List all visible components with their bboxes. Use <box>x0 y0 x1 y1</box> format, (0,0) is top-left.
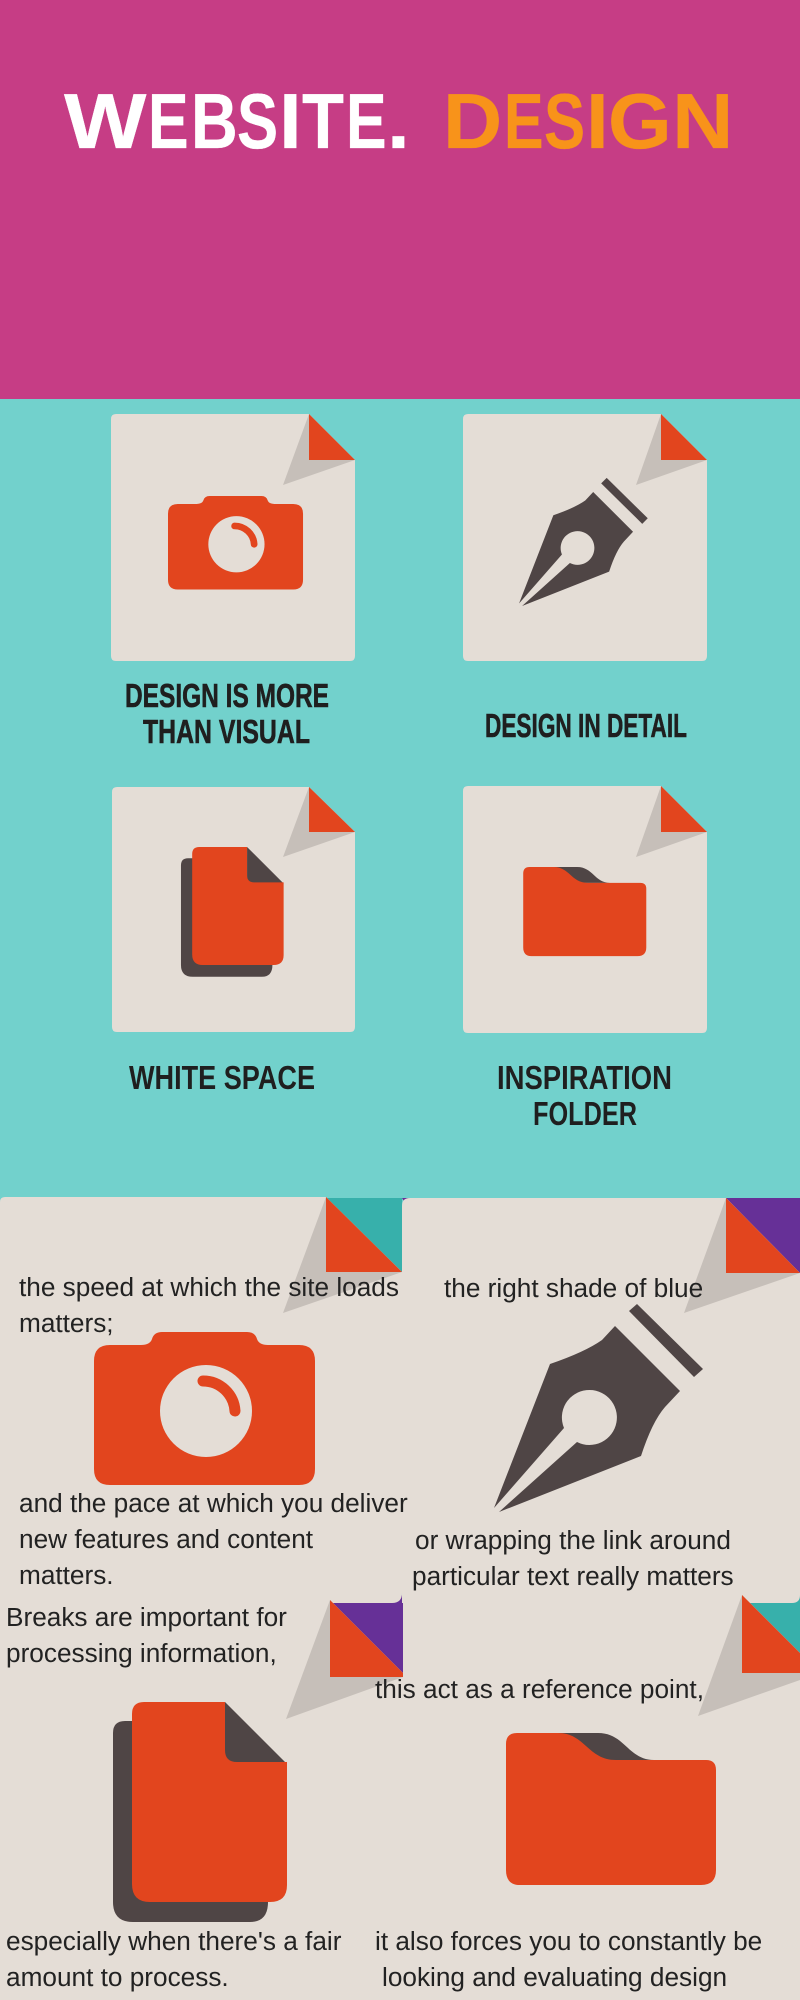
heading: design is more than visual <box>125 677 329 750</box>
text: pace: matters. <box>19 1560 114 1590</box>
text: especially: amount to process. <box>6 1962 229 1992</box>
heading: design in detail: DESIGN IN DETAIL <box>485 707 687 744</box>
fold: panel 3 <box>286 1600 403 1719</box>
fold: panel 1 <box>283 1197 402 1313</box>
card: camera <box>111 414 355 661</box>
text: speed: the speed at which the site loads <box>19 1272 399 1302</box>
corner square: panel 4 teal <box>742 1595 800 1655</box>
heading: design is more than visual: THAN VISUAL <box>143 713 310 750</box>
title: website: I <box>279 77 302 165</box>
title: design: D <box>443 77 502 165</box>
panel: lower right beige <box>403 1595 800 2000</box>
text: especially: especially when there's a fair <box>6 1926 342 1956</box>
heading: white space: WHITE SPACE <box>129 1059 315 1096</box>
text: forces: looking and evaluating design <box>382 1962 727 1992</box>
heading: design is more than visual: DESIGN IS MORE <box>125 677 329 714</box>
title: design <box>443 77 733 165</box>
icon: pen nib <box>519 478 648 606</box>
panel: speed paper <box>0 1197 402 1603</box>
title: website: . <box>387 77 410 165</box>
fold: panel 4 <box>698 1595 800 1716</box>
text: forces: it also forces you to constantly be <box>375 1926 762 1956</box>
panel: blue shade paper <box>402 1198 800 1603</box>
text: wrapping link: or wrapping the link around <box>415 1525 731 1555</box>
icon: documents <box>181 847 284 977</box>
title: website: E <box>346 77 386 165</box>
text: pace: new features and content <box>19 1524 314 1554</box>
icon: large folder <box>506 1733 716 1885</box>
title: website: S <box>237 77 278 165</box>
text: breaks <box>6 1602 287 1668</box>
title: website: W <box>64 77 146 165</box>
card: document <box>112 787 355 1032</box>
title: website: T <box>302 77 344 165</box>
heading: inspiration folder: FOLDER <box>533 1095 637 1132</box>
title: design: I <box>586 77 609 165</box>
icon: folder <box>523 867 646 956</box>
corner square: panel 1 teal <box>326 1198 402 1273</box>
icon: camera <box>168 496 303 589</box>
title: website: B <box>190 77 237 165</box>
icon: large camera <box>94 1332 315 1485</box>
background: teal section <box>0 399 800 1209</box>
title: design: S <box>544 77 585 165</box>
text: wrapping link: particular text really matters <box>412 1561 734 1591</box>
title: design: G <box>608 77 672 165</box>
text: speed: matters; <box>19 1308 114 1338</box>
title: website <box>64 77 410 165</box>
text: breaks: Breaks are important for <box>6 1602 287 1632</box>
heading: inspiration folder: INSPIRATION <box>497 1059 672 1096</box>
icon: large documents <box>113 1702 287 1922</box>
text: pace: and the pace at which you deliver <box>19 1488 408 1518</box>
text: forces <box>375 1926 762 1992</box>
panel: lower left beige <box>0 1600 403 2000</box>
heading: inspiration folder <box>497 1059 672 1132</box>
text: especially <box>6 1926 342 1992</box>
text: right shade: the right shade of blue <box>444 1273 703 1303</box>
header band <box>0 0 800 399</box>
corner square: panel 3 purple <box>330 1595 403 1677</box>
text: wrapping link <box>412 1525 734 1591</box>
card: folder <box>463 786 707 1033</box>
text: speed <box>19 1272 399 1338</box>
corner square: panel 2 purple <box>402 1198 800 1274</box>
text: breaks: processing information, <box>6 1638 277 1668</box>
text: pace <box>19 1488 408 1590</box>
title: design: E <box>504 77 543 165</box>
title: design: N <box>672 77 733 165</box>
icon: large pen nib <box>494 1304 703 1512</box>
text: reference point: this act as a reference point, <box>375 1674 704 1704</box>
title: website: E <box>148 77 188 165</box>
fold: panel 2 <box>684 1198 800 1313</box>
card: pen <box>463 414 707 661</box>
